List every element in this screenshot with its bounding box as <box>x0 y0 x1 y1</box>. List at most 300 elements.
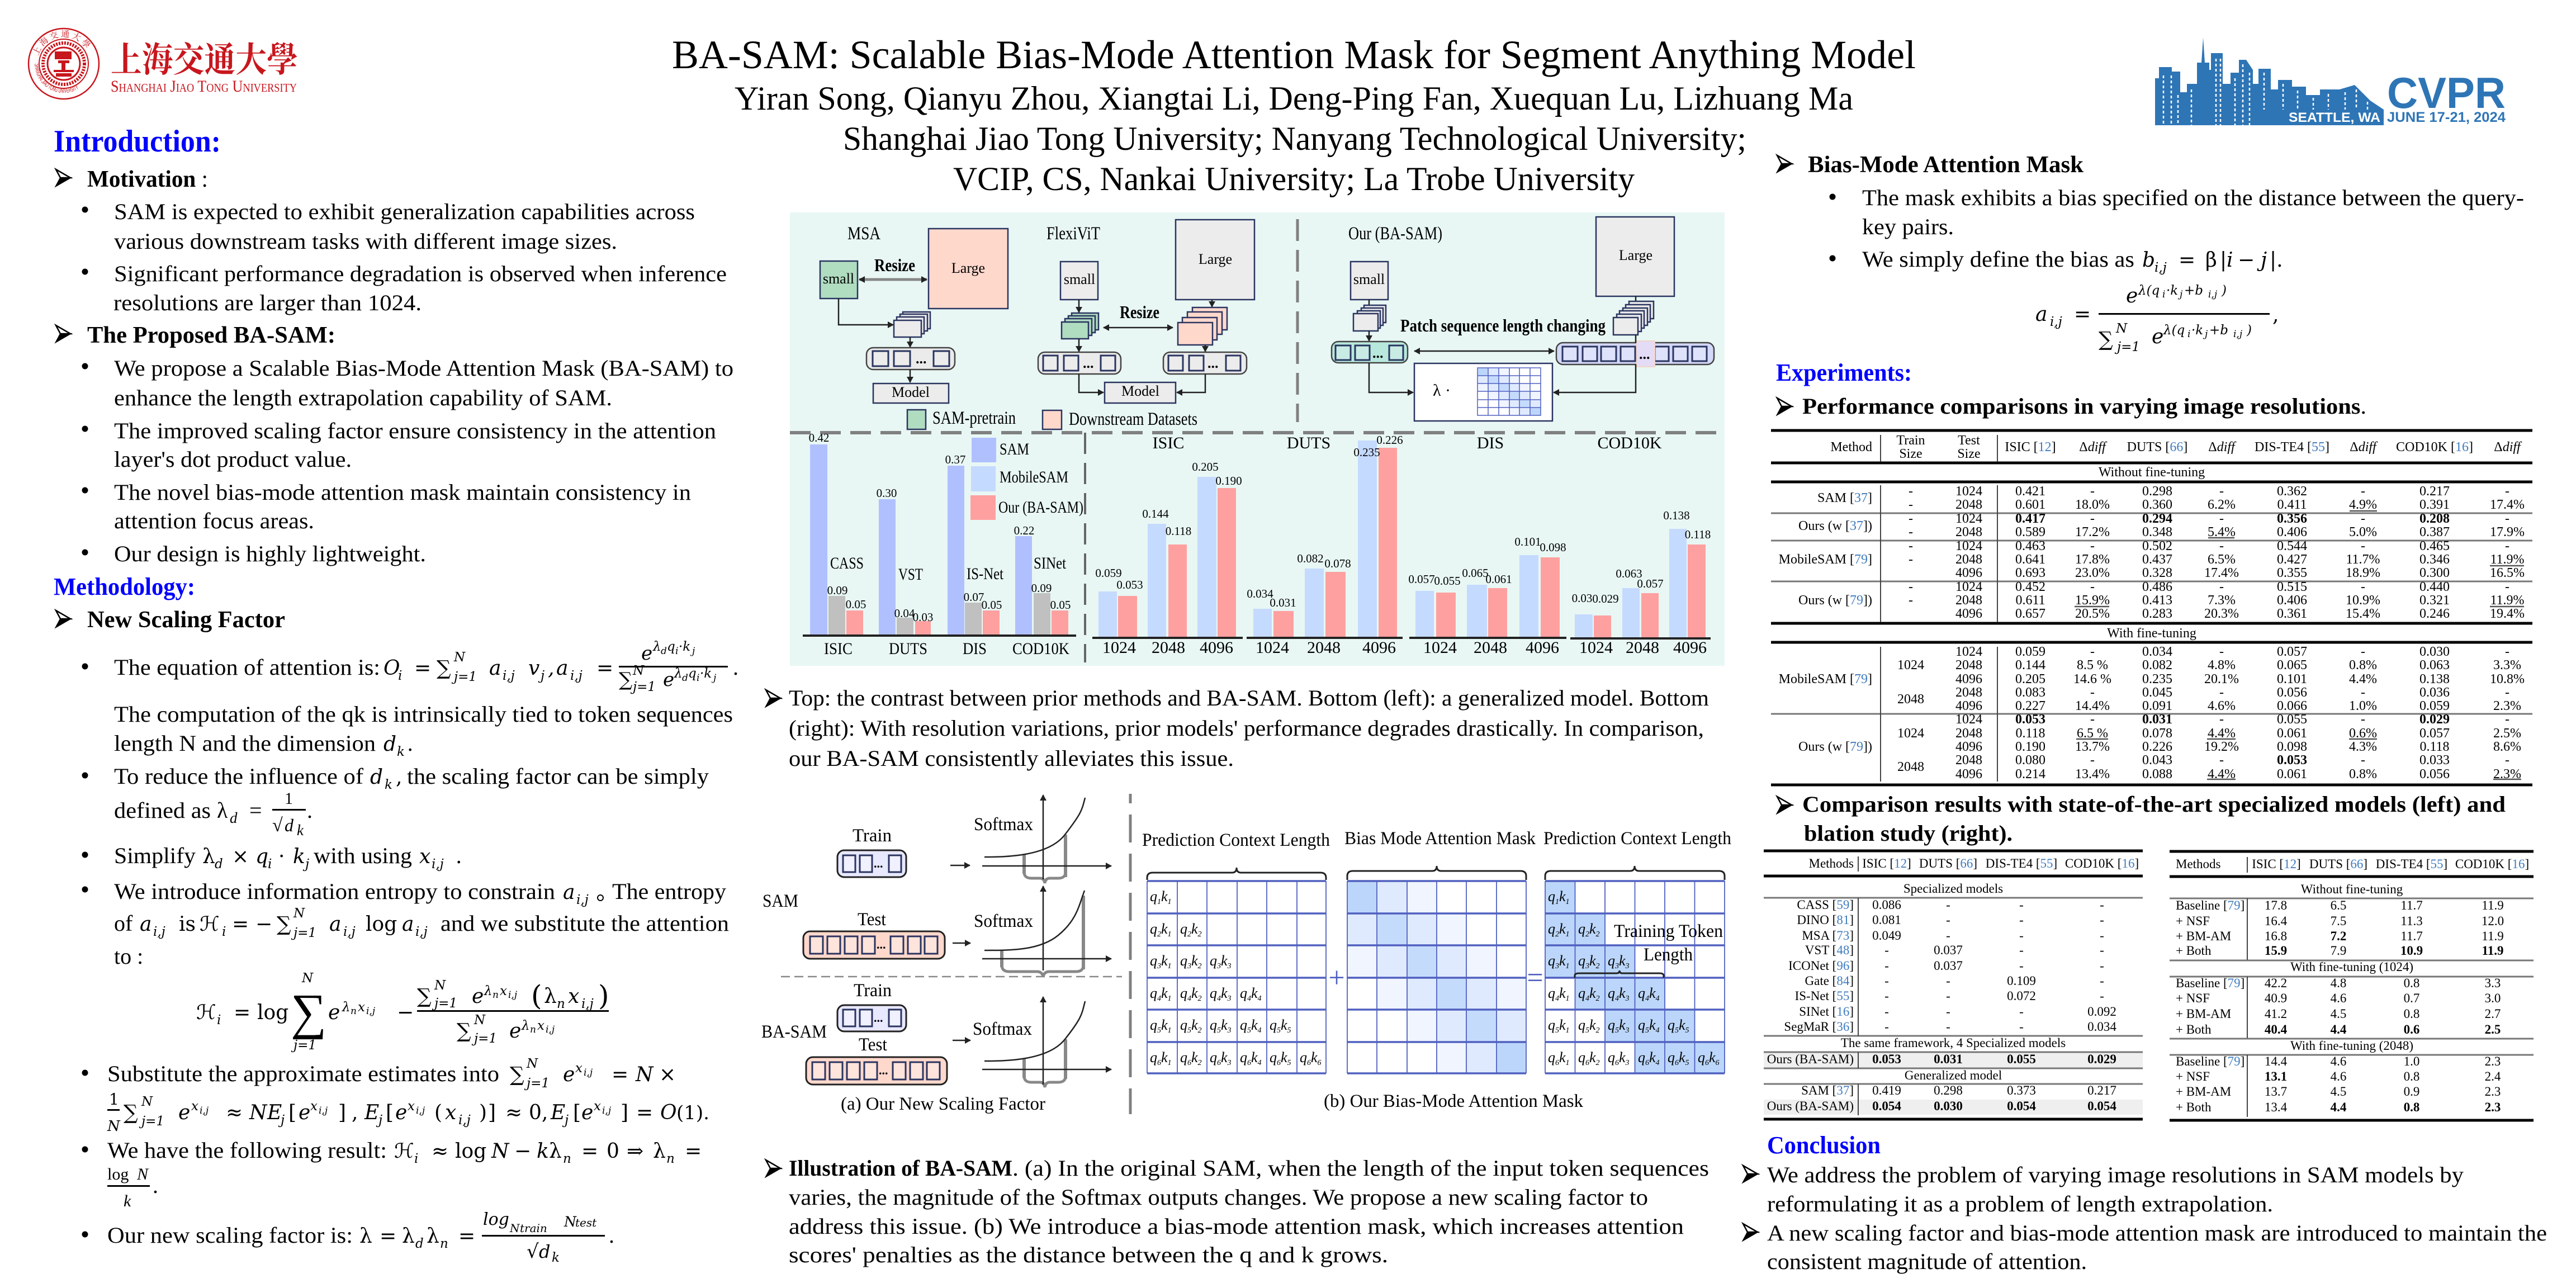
text block: equation of attention: a <box>556 657 568 680</box>
table: performance comparisons: 0.118 <box>2419 740 2450 754</box>
formula: attention with bias: ) <box>2221 283 2227 298</box>
text block: approximate estimates: j=1 <box>139 1114 164 1129</box>
grid: resulting attention matrix: 5 <box>1615 1026 1619 1035</box>
text block: equation of attention: d <box>661 646 667 657</box>
table: performance comparisons: With fine-tuning <box>2107 626 2196 641</box>
diagram: Our BA-SAM <box>1332 217 1714 421</box>
tokens: test BA-SAM <box>806 1057 947 1085</box>
grid: resulting attention matrix: 3 <box>1625 962 1630 970</box>
formula: entropy expansion: ℋ <box>196 1001 216 1024</box>
table: performance comparisons: - <box>2090 512 2095 526</box>
grid: resulting attention matrix: k <box>1559 921 1566 937</box>
grid: prediction context matrix: q <box>1150 888 1157 905</box>
grid: bias mode attention mask <box>1347 881 1526 1073</box>
table: performance comparisons: 1024 <box>1955 645 1982 659</box>
text block: mask description: |. <box>2270 249 2283 272</box>
arrows: tokens to softmax <box>950 865 970 1040</box>
text block: scaling factor definition: = <box>249 798 262 823</box>
table: performance comparisons: - <box>1909 525 1913 539</box>
table: ablation study: 12.0 <box>2482 914 2504 928</box>
grid: resulting attention matrix: 1 <box>1566 995 1570 1003</box>
table: performance comparisons: 3.3% <box>2493 658 2521 673</box>
table: state-of-the-art specialized models: 0.053 <box>1872 1052 1901 1066</box>
text block: motivation bullets: various downstream tasks with different image sizes. <box>114 229 617 254</box>
grid: resulting attention matrix: q <box>1578 985 1585 1001</box>
table: performance comparisons: 0.601 <box>2015 498 2045 512</box>
diagram: MSA: MSA <box>847 224 880 244</box>
bar chart: resolutions 1024 2048 4096: 0.031 <box>1270 596 1296 609</box>
table: state-of-the-art specialized models: SAM [37] <box>1801 1083 1854 1097</box>
table: ablation study: 4.6 <box>2331 991 2346 1005</box>
table: performance comparisons: 0.361 <box>2277 607 2307 621</box>
table: performance comparisons: 0.417 <box>2015 512 2045 526</box>
text block: approximate estimates: x <box>575 1061 583 1076</box>
grid: resulting attention matrix: 4 <box>1656 1026 1660 1035</box>
grid: resulting attention matrix: q <box>1608 1049 1615 1066</box>
logo: Shanghai Jiao Tong University: SHANGHAI JIAO TONG UNIVERSITY <box>35 64 78 93</box>
grid: resulting attention matrix: k <box>1619 1017 1626 1033</box>
table: performance comparisons: 0.360 <box>2142 498 2172 512</box>
table: performance comparisons: 0.427 <box>2277 552 2307 567</box>
panel: bias-mode attention mask text <box>1777 152 2524 354</box>
grid: prediction context matrix: 5 <box>1287 1059 1291 1067</box>
tokens: train BA-SAM: ... <box>874 1011 883 1025</box>
grid: resulting attention matrix: k <box>1589 1017 1596 1033</box>
table: performance comparisons: 1.0% <box>2349 699 2377 713</box>
table: state-of-the-art specialized models: 0.086 <box>1872 898 1901 912</box>
table: state-of-the-art specialized models: 0.034 <box>2087 1020 2116 1034</box>
grid: resulting attention matrix: 6 <box>1645 1059 1649 1067</box>
text block: approximate estimates: j <box>278 1113 285 1128</box>
diagram: MSA: Model <box>892 384 930 400</box>
text block: simplify: Simplify <box>114 843 196 868</box>
text block: equation of attention: v <box>528 657 539 680</box>
text block: mask description: j <box>2257 249 2267 272</box>
table: state-of-the-art specialized models: - <box>2019 913 2024 927</box>
table: performance comparisons: 1024 <box>1897 658 1924 673</box>
table: ablation study: 41.2 <box>2265 1007 2287 1021</box>
table: state-of-the-art specialized models: - <box>2019 929 2024 943</box>
table: performance comparisons: 13.4% <box>2075 767 2110 782</box>
bar chart: resolutions 1024 2048 4096: 0.061 <box>1485 572 1512 586</box>
text block: following result: n <box>563 1152 571 1166</box>
table: performance comparisons: 4096 <box>1955 672 1982 686</box>
table: performance comparisons: DIS-TE4 [55] <box>2255 440 2329 454</box>
table: performance comparisons: 0.411 <box>2277 498 2307 512</box>
table: state-of-the-art specialized models: 0.072 <box>2007 989 2036 1003</box>
table: performance comparisons: 0.066 <box>2277 699 2307 713</box>
grid: resulting attention matrix: q <box>1578 953 1585 969</box>
table: state-of-the-art specialized models: 0.054 <box>2087 1099 2116 1113</box>
table: performance comparisons: Ours (w [79]) <box>1798 740 1872 754</box>
text block: equation of attention <box>82 640 738 759</box>
table: state-of-the-art specialized models: 0.419 <box>1872 1083 1901 1097</box>
formula: attention with bias: a <box>2035 303 2047 326</box>
formula: entropy expansion: i <box>217 1013 221 1027</box>
grid: resulting attention matrix: k <box>1619 985 1626 1001</box>
grid: prediction context matrix: k <box>1221 1049 1228 1066</box>
text block: following result: . <box>153 1173 158 1198</box>
table: state-of-the-art specialized models: 0.054 <box>2007 1099 2036 1113</box>
table: performance comparisons: Without fine-tuning <box>2099 465 2205 480</box>
table: performance comparisons: 1024 <box>1955 539 1982 553</box>
table: ablation study: 10.9 <box>2400 944 2423 958</box>
table: performance comparisons: - <box>2219 580 2224 594</box>
caption: top figure description: (right): With resolution variations, prior models' performance degrades drastically. In comparison, <box>789 716 1704 741</box>
text block: following result: = <box>581 1140 598 1163</box>
table: ablation study: + BM-AM <box>2176 1085 2231 1098</box>
table: state-of-the-art specialized models: 0.029 <box>2087 1052 2116 1066</box>
grid: prediction context matrix: q <box>1150 921 1157 937</box>
grid: prediction context matrix: 5 <box>1187 1026 1191 1035</box>
table: performance comparisons: 0.413 <box>2142 593 2172 608</box>
formula: entropy expansion: i,j <box>366 1006 376 1017</box>
table: performance comparisons: 19.2% <box>2204 740 2239 754</box>
formula: attention with bias: λ(q <box>2138 283 2160 298</box>
table: performance comparisons: 20.5% <box>2075 607 2110 621</box>
bar chart: resolutions 1024 2048 4096: 0.118 <box>1166 524 1191 538</box>
text block: simplify: i,j <box>432 857 444 872</box>
table: performance comparisons: - <box>2505 685 2509 700</box>
table: performance comparisons: 14.4% <box>2075 699 2110 713</box>
grid: prediction context matrix: k <box>1161 985 1168 1001</box>
text block: equation of attention: O <box>383 657 400 680</box>
text block: simplify: k <box>293 845 305 868</box>
table: performance comparisons: 10.9% <box>2346 593 2380 608</box>
grid: prediction context matrix: 1 <box>1168 1059 1172 1067</box>
formula: entropy expansion: N <box>473 1013 486 1027</box>
table: performance comparisons: 0.055 <box>2277 712 2307 727</box>
table: performance comparisons: 1024 <box>1955 512 1982 526</box>
text block: equation of attention: j <box>711 673 717 684</box>
text block: scaling factor definition: the scaling factor can be simply <box>407 764 709 789</box>
table: performance comparisons: 0.300 <box>2419 566 2450 580</box>
text block: following result: k <box>124 1192 131 1210</box>
table: ablation study: 0.8 <box>2404 976 2419 990</box>
text block: following result: n <box>666 1152 675 1166</box>
panel: new scaling factor diagram: Softmax <box>974 815 1033 835</box>
bar chart: resolutions 1024 2048 4096: 2048 <box>1474 638 1507 657</box>
text block: approximate estimates: x <box>310 1099 318 1114</box>
grid: resulting attention matrix: 5 <box>1585 1026 1589 1035</box>
table: state-of-the-art specialized models: ICONet [96] <box>1788 959 1854 973</box>
bar chart: specialized models: 0.05 <box>846 598 866 611</box>
grid: prediction context matrix: q <box>1180 1017 1187 1033</box>
grid: prediction context matrix: 6 <box>1307 1059 1311 1067</box>
table: ablation study: + BM-AM <box>2176 1007 2231 1021</box>
grid: prediction context matrix: k <box>1191 921 1198 937</box>
grid: resulting attention matrix: q <box>1548 985 1555 1001</box>
bar chart: specialized models: 0.05 <box>982 598 1002 612</box>
grid: resulting attention matrix: 4 <box>1585 995 1589 1003</box>
grid: prediction context matrix: 5 <box>1277 1026 1281 1035</box>
table: performance comparisons: 0.589 <box>2015 525 2045 539</box>
heading: new scaling factor: New Scaling Factor <box>87 607 285 633</box>
table: performance comparisons: 17.4% <box>2204 566 2239 580</box>
table: performance comparisons: 2048 <box>1955 525 1982 539</box>
caption: (a) our new scaling factor: (a) Our New Scaling Factor <box>841 1094 1045 1114</box>
table: performance comparisons: Δdiff <box>2494 440 2521 454</box>
icon: arrow bullet <box>56 325 70 342</box>
table: performance comparisons: MobileSAM [79] <box>1779 552 1872 567</box>
text block: scaling factor definition: d <box>230 809 238 826</box>
table: performance comparisons: 0.205 <box>2015 672 2045 686</box>
logo: CVPR Seattle: SEATTLE, WA <box>2289 110 2380 125</box>
table: performance comparisons: 0.611 <box>2015 593 2045 608</box>
table: performance comparisons: 0.463 <box>2015 539 2045 553</box>
grid: resulting attention matrix: k <box>1679 1049 1685 1066</box>
text block: equation of attention: ·k <box>700 666 712 681</box>
table: performance comparisons: - <box>2219 512 2224 526</box>
legend: SAM, MobileSAM, Our BA-SAM: SAM <box>1000 440 1029 458</box>
text block: proposed bullets: Our design is highly lightweight. <box>114 541 426 566</box>
grid: prediction context matrix: k <box>1281 1049 1287 1066</box>
grid: prediction context matrix: 4 <box>1247 995 1251 1003</box>
text block: approximate estimates: e <box>581 1101 593 1124</box>
formula: entropy expansion: N <box>301 971 314 986</box>
text block: equation of attention: d <box>383 733 396 756</box>
table: state-of-the-art specialized models: VST [48] <box>1805 943 1854 957</box>
table: performance comparisons: 4096 <box>1955 740 1982 754</box>
table: state-of-the-art specialized models: DINO [81] <box>1797 913 1854 927</box>
formula: entropy expansion: n <box>530 1024 536 1035</box>
text block: equation of attention: , <box>548 657 554 680</box>
bar chart: resolutions 1024 2048 4096: 1024 <box>1579 638 1613 657</box>
grid: prediction context matrix: k <box>1191 953 1198 969</box>
grid: resulting attention matrix: k <box>1559 1017 1566 1033</box>
table: ablation study: 1.0 <box>2404 1054 2419 1068</box>
text block: approximate estimates: ≈ <box>505 1101 522 1124</box>
text block: equation of attention: . <box>733 655 738 680</box>
grid: resulting attention matrix: q <box>1608 985 1615 1001</box>
formula: entropy expansion: x <box>358 1000 365 1015</box>
grid: resulting attention matrix: 2 <box>1596 930 1600 939</box>
bar chart: specialized models: DUTS <box>889 640 927 658</box>
grid: prediction context matrix: 4 <box>1217 995 1221 1003</box>
text block: mask description: i,j <box>2154 261 2167 275</box>
text block: scaling factor definition: To reduce the influence of <box>114 764 364 789</box>
table: performance comparisons: 15.9% <box>2075 593 2110 608</box>
text block: scaling factor definition: defined as <box>114 798 211 823</box>
text block: approximate estimates: ≈ <box>226 1101 243 1124</box>
grid: prediction context matrix: k <box>1221 1017 1228 1033</box>
text block: equation of attention: The computation of the qk is intrinsically tied to token sequences <box>114 702 733 727</box>
table: performance comparisons: 0.356 <box>2277 512 2307 526</box>
table: state-of-the-art specialized models: - <box>1946 898 1950 912</box>
grid: resulting attention matrix: q <box>1548 953 1555 969</box>
text block: approximate estimates: ∑ <box>124 1101 138 1124</box>
table: state-of-the-art specialized models: - <box>1884 1020 1889 1034</box>
table: performance comparisons: 4.4% <box>2208 767 2236 782</box>
bar chart: resolutions 1024 2048 4096: DUTS <box>1287 434 1330 452</box>
text block: following result <box>82 1138 702 1210</box>
bar chart: resolutions 1024 2048 4096: 0.057 <box>1637 577 1664 590</box>
table: ablation study: Baseline [79] <box>2176 1054 2244 1068</box>
table: performance comparisons: - <box>2219 712 2224 727</box>
chart: softmax curve test <box>982 886 1111 977</box>
table: ablation study: 40.9 <box>2265 991 2287 1005</box>
text block: proposed bullets: enhance the length extrapolation capability of SAM. <box>114 385 612 410</box>
heading: prediction context length: Prediction Context Length <box>1142 830 1330 850</box>
grid: prediction context matrix: k <box>1161 888 1168 905</box>
tokens: train SAM: ... <box>874 856 883 870</box>
table: performance comparisons: Train <box>1896 433 1925 448</box>
bar chart: specialized models: IS-Net <box>967 565 1004 583</box>
text block: following result: N <box>491 1140 510 1163</box>
grid: resulting attention matrix: k <box>1589 921 1596 937</box>
table: performance comparisons: 0.029 <box>2419 712 2450 727</box>
table: ablation study: 15.9 <box>2265 944 2287 958</box>
table: performance comparisons: 0.056 <box>2277 685 2307 700</box>
text block: information entropy: is <box>179 913 196 936</box>
text block: equation of attention: The equation of attention is: <box>114 655 380 680</box>
table: performance comparisons: 4.8% <box>2208 658 2236 673</box>
grid: prediction context matrix: 3 <box>1227 1059 1232 1067</box>
table: state-of-the-art specialized models: - <box>1946 989 1950 1003</box>
grid: resulting attention matrix: 5 <box>1645 1026 1649 1035</box>
bar chart: resolutions 1024 2048 4096: 2048 <box>1152 638 1185 657</box>
text block: new scaling factor formula <box>82 1210 614 1265</box>
grid: prediction context matrix: k <box>1251 985 1258 1001</box>
table: performance comparisons <box>1771 430 2532 785</box>
grid: prediction context matrix: 5 <box>1287 1026 1291 1035</box>
table: performance comparisons: 0.515 <box>2277 580 2307 594</box>
bar chart: resolutions 1024 2048 4096: COD10K <box>1597 434 1662 452</box>
panel: new scaling factor diagram: Softmax <box>973 1019 1032 1039</box>
bar chart: resolutions 1024 2048 4096: 0.063 <box>1616 567 1642 580</box>
table: performance comparisons: - <box>2361 539 2365 553</box>
grid: resulting attention matrix: 4 <box>1656 995 1660 1003</box>
table: performance comparisons: 0.031 <box>2142 712 2172 727</box>
heading: performance comparisons: Performance comparisons in varying image resolutions . <box>1802 394 2366 419</box>
table: state-of-the-art specialized models: 0.037 <box>1934 959 1963 973</box>
table: performance comparisons: 4.9% <box>2349 498 2377 512</box>
table: state-of-the-art specialized models: Specialized models <box>1903 882 2003 896</box>
table: performance comparisons: - <box>2090 484 2095 499</box>
chart: softmax curve train <box>982 795 1111 883</box>
table: ablation study: 7.2 <box>2331 929 2346 943</box>
bar chart: resolutions 1024 2048 4096: 0.059 <box>1095 566 1122 580</box>
text block: information entropy: i,j <box>153 925 165 939</box>
grid: prediction context matrix: k <box>1251 1049 1258 1066</box>
text block: mask description: | <box>2220 249 2227 272</box>
table: ablation study: 3.3 <box>2485 976 2501 990</box>
table: performance comparisons: 2048 <box>1955 685 1982 700</box>
bar chart: resolutions 1024 2048 4096: 0.235 <box>1353 446 1380 459</box>
panel: new scaling factor diagram: Test <box>858 910 886 930</box>
authors and affiliations: Yiran Song, Qianyu Zhou, Xiangtai Li, Deng-Ping Fan, Xuequan Lu, Lizhuang Ma <box>735 80 1853 117</box>
table: performance comparisons: 0.036 <box>2419 685 2450 700</box>
table: performance comparisons: 13.7% <box>2075 740 2110 754</box>
heading: bias mode attention mask: Bias Mode Attention Mask <box>1344 828 1536 849</box>
legend: SAM-pretrain and downstream datasets: Downstream Datasets <box>1069 409 1197 429</box>
table: performance comparisons: 1024 <box>1955 712 1982 727</box>
text block: equation of attention: = <box>414 657 431 680</box>
text block: motivation bullets: Significant performance degradation is observed when inference <box>114 261 727 286</box>
table: performance comparisons: - <box>2090 580 2095 594</box>
logo: Shanghai Jiao Tong University: 上海交通大學 <box>111 41 298 79</box>
table: ablation study: 2.4 <box>2485 1069 2501 1083</box>
tokens: test SAM <box>803 931 945 959</box>
diagram: Our BA-SAM: Our (BA-SAM) <box>1348 224 1442 244</box>
table: ablation study: 0.9 <box>2404 1085 2419 1098</box>
grid: resulting attention matrix: q <box>1578 1017 1585 1033</box>
bar chart: resolutions 1024 2048 4096: 0.03 <box>1572 591 1592 605</box>
table: performance comparisons: 0.387 <box>2419 525 2450 539</box>
bar chart: specialized models: 0.04 <box>894 607 915 620</box>
diagram: MSA: small <box>823 271 854 287</box>
grid: resulting attention matrix: k <box>1589 953 1596 969</box>
table: ablation study: 7.5 <box>2331 914 2346 928</box>
grid: prediction context matrix: 6 <box>1277 1059 1281 1067</box>
table: performance comparisons: Ours (w [79]) <box>1798 593 1872 608</box>
text block: information entropy: N <box>293 906 305 921</box>
text block: mask description: b <box>2142 249 2155 272</box>
grid: prediction context matrix: 3 <box>1227 995 1232 1003</box>
table: performance comparisons: - <box>2361 753 2365 768</box>
table: performance comparisons: - <box>2361 512 2365 526</box>
grid: resulting attention matrix: 6 <box>1705 1059 1709 1067</box>
grid: prediction context matrix: k <box>1161 1017 1168 1033</box>
diagram: Our BA-SAM: ... <box>1372 345 1383 361</box>
table: performance comparisons: 0.362 <box>2277 484 2307 499</box>
text block: simplify: . <box>456 845 462 868</box>
grid: prediction context matrix: q <box>1300 1049 1307 1066</box>
table: ablation study: + NSF <box>2176 1069 2210 1083</box>
table: performance comparisons: 6.5% <box>2208 552 2236 567</box>
table: state-of-the-art specialized models: 0.031 <box>1934 1052 1963 1066</box>
table: ablation study: 11.3 <box>2400 914 2423 928</box>
formula: entropy expansion: x <box>568 985 579 1008</box>
bar chart: specialized models: CASS <box>830 554 864 572</box>
table: performance comparisons: 7.3% <box>2208 593 2236 608</box>
table: performance comparisons: 1024 <box>1955 484 1982 499</box>
text block: simplify: with using <box>314 843 412 868</box>
diagram: MSA <box>820 224 1008 403</box>
grid: prediction context matrix: 2 <box>1198 995 1202 1003</box>
formula: attention with bias: i <box>2162 289 2165 300</box>
text block: approximate estimates: [ <box>573 1101 581 1124</box>
grid: resulting attention matrix: 5 <box>1685 1059 1689 1067</box>
caption: illustration of BA-SAM: address this issue. (b) We introduce a bias-mode attention mask, which increases attention <box>789 1214 1684 1239</box>
table: ablation study: 14.4 <box>2265 1054 2288 1068</box>
table: state-of-the-art specialized models: 0.049 <box>1872 929 1901 943</box>
table: ablation study: 6.5 <box>2331 898 2346 912</box>
grid: resulting attention matrix: k <box>1559 888 1566 905</box>
text block: scaling factor definition: 1 <box>285 789 293 808</box>
table: ablation study: 16.4 <box>2265 914 2288 928</box>
table: state-of-the-art specialized models: 0.037 <box>1934 943 1963 957</box>
table: performance comparisons: 4096 <box>1955 767 1982 782</box>
table: ablation study: 3.0 <box>2485 991 2501 1005</box>
text block: approximate estimates: 0, <box>529 1101 548 1124</box>
table: performance comparisons: 0.693 <box>2015 566 2045 580</box>
bar chart: specialized models: ISIC <box>824 640 853 658</box>
grid: resulting attention matrix: k <box>1559 985 1566 1001</box>
formula: attention with bias: i,j <box>2208 289 2218 300</box>
table: state-of-the-art specialized models: - <box>2100 929 2104 943</box>
formula: entropy expansion: i,j <box>508 989 518 1001</box>
table: state-of-the-art specialized models: - <box>2100 913 2104 927</box>
text block: approximate estimates: i,j <box>602 1105 612 1116</box>
panel: new scaling factor diagram: BA-SAM <box>761 1022 827 1042</box>
grid: resulting attention matrix: k <box>1649 985 1656 1001</box>
text block: equation of attention: N <box>453 650 466 665</box>
text block: equation of attention: i <box>675 646 678 657</box>
grid: resulting attention matrix: 2 <box>1596 995 1600 1003</box>
grid: resulting attention matrix: 6 <box>1675 1059 1679 1067</box>
formula: entropy expansion: n <box>351 1006 357 1017</box>
